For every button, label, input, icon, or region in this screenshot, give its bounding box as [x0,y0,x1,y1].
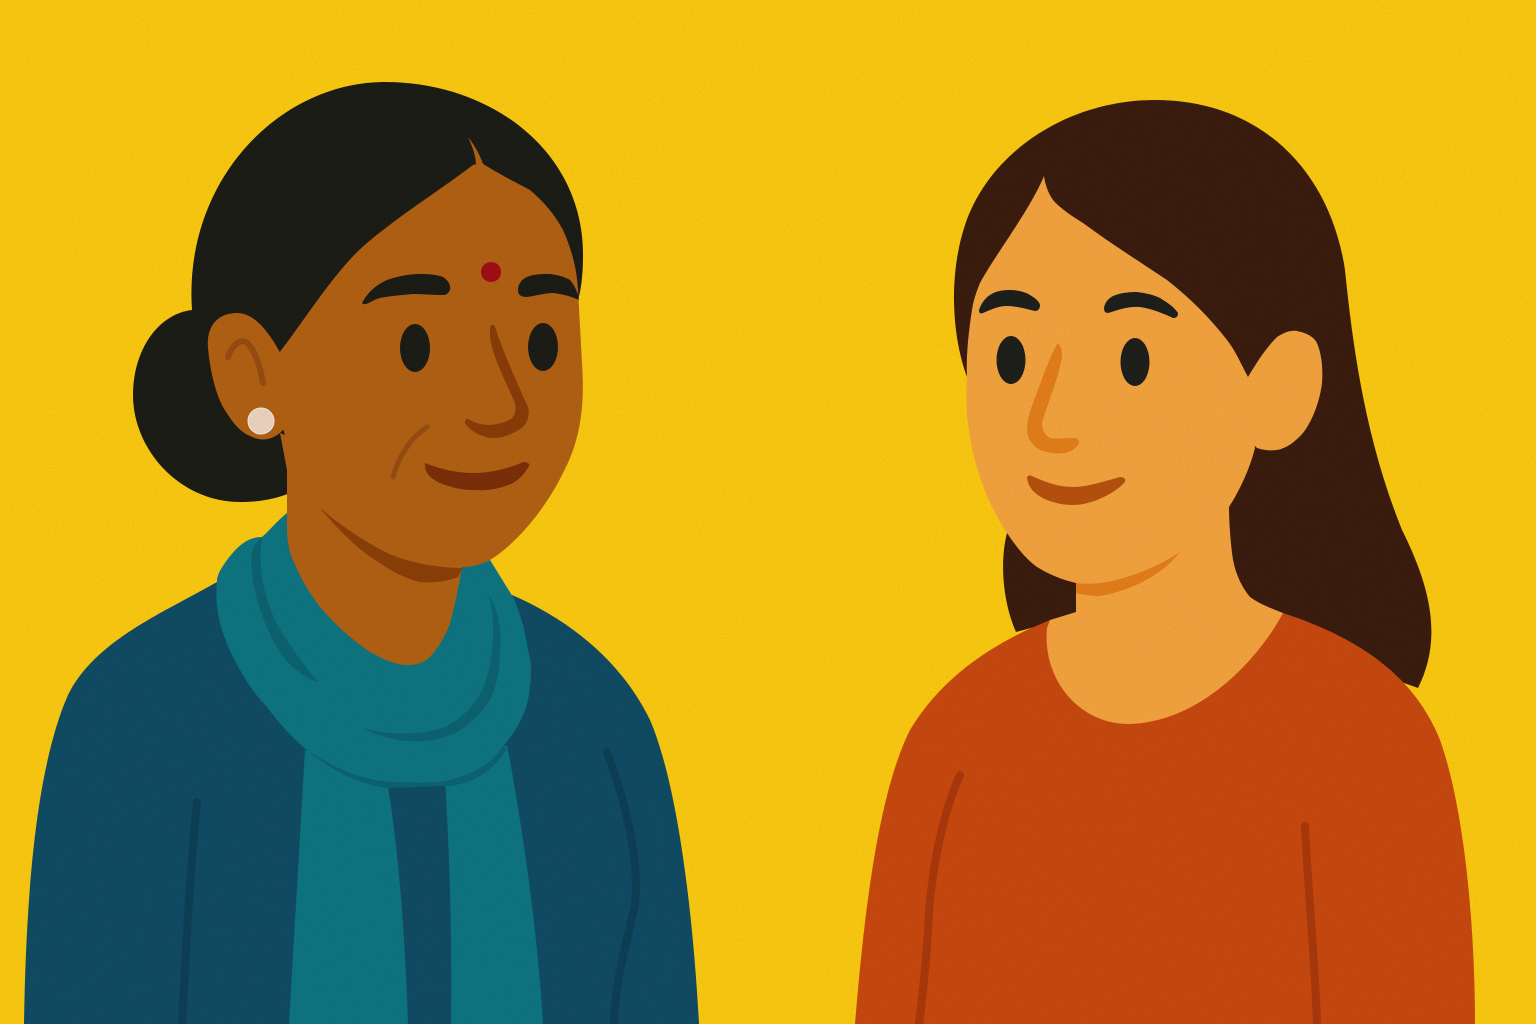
scarf fold right [362,595,501,741]
shirt [855,613,1475,1024]
scarf shadow under roll [305,735,507,788]
figure: younger woman on the right [855,100,1475,1024]
chin shadow [320,508,463,582]
nose [1027,343,1079,453]
scarf tail left [289,750,408,1024]
eyebrows [979,290,1178,318]
hair back [954,100,1431,688]
scarf [216,513,543,1024]
eyes [400,323,558,372]
ear [208,313,310,439]
figure: older woman on the left [24,82,699,1024]
eyes [996,336,1150,386]
cheek wrinkle [393,427,427,477]
chin shadow [1076,552,1180,596]
bindi [481,262,501,282]
jacket [24,582,699,1024]
face [966,176,1255,584]
face [279,163,583,568]
scarf fold left [251,538,318,682]
hair parting [468,137,483,166]
hair lower left [1003,533,1080,632]
smile [425,462,529,490]
ear [1230,331,1322,450]
neck [280,433,462,665]
hair bun [133,310,300,502]
hair back [191,82,583,360]
scarf roll [216,513,531,783]
earring [248,408,274,434]
eyebrows [362,274,579,304]
smile [1027,475,1125,505]
nose [465,325,529,438]
neck [1047,507,1283,724]
scarf tail right [445,745,543,1024]
